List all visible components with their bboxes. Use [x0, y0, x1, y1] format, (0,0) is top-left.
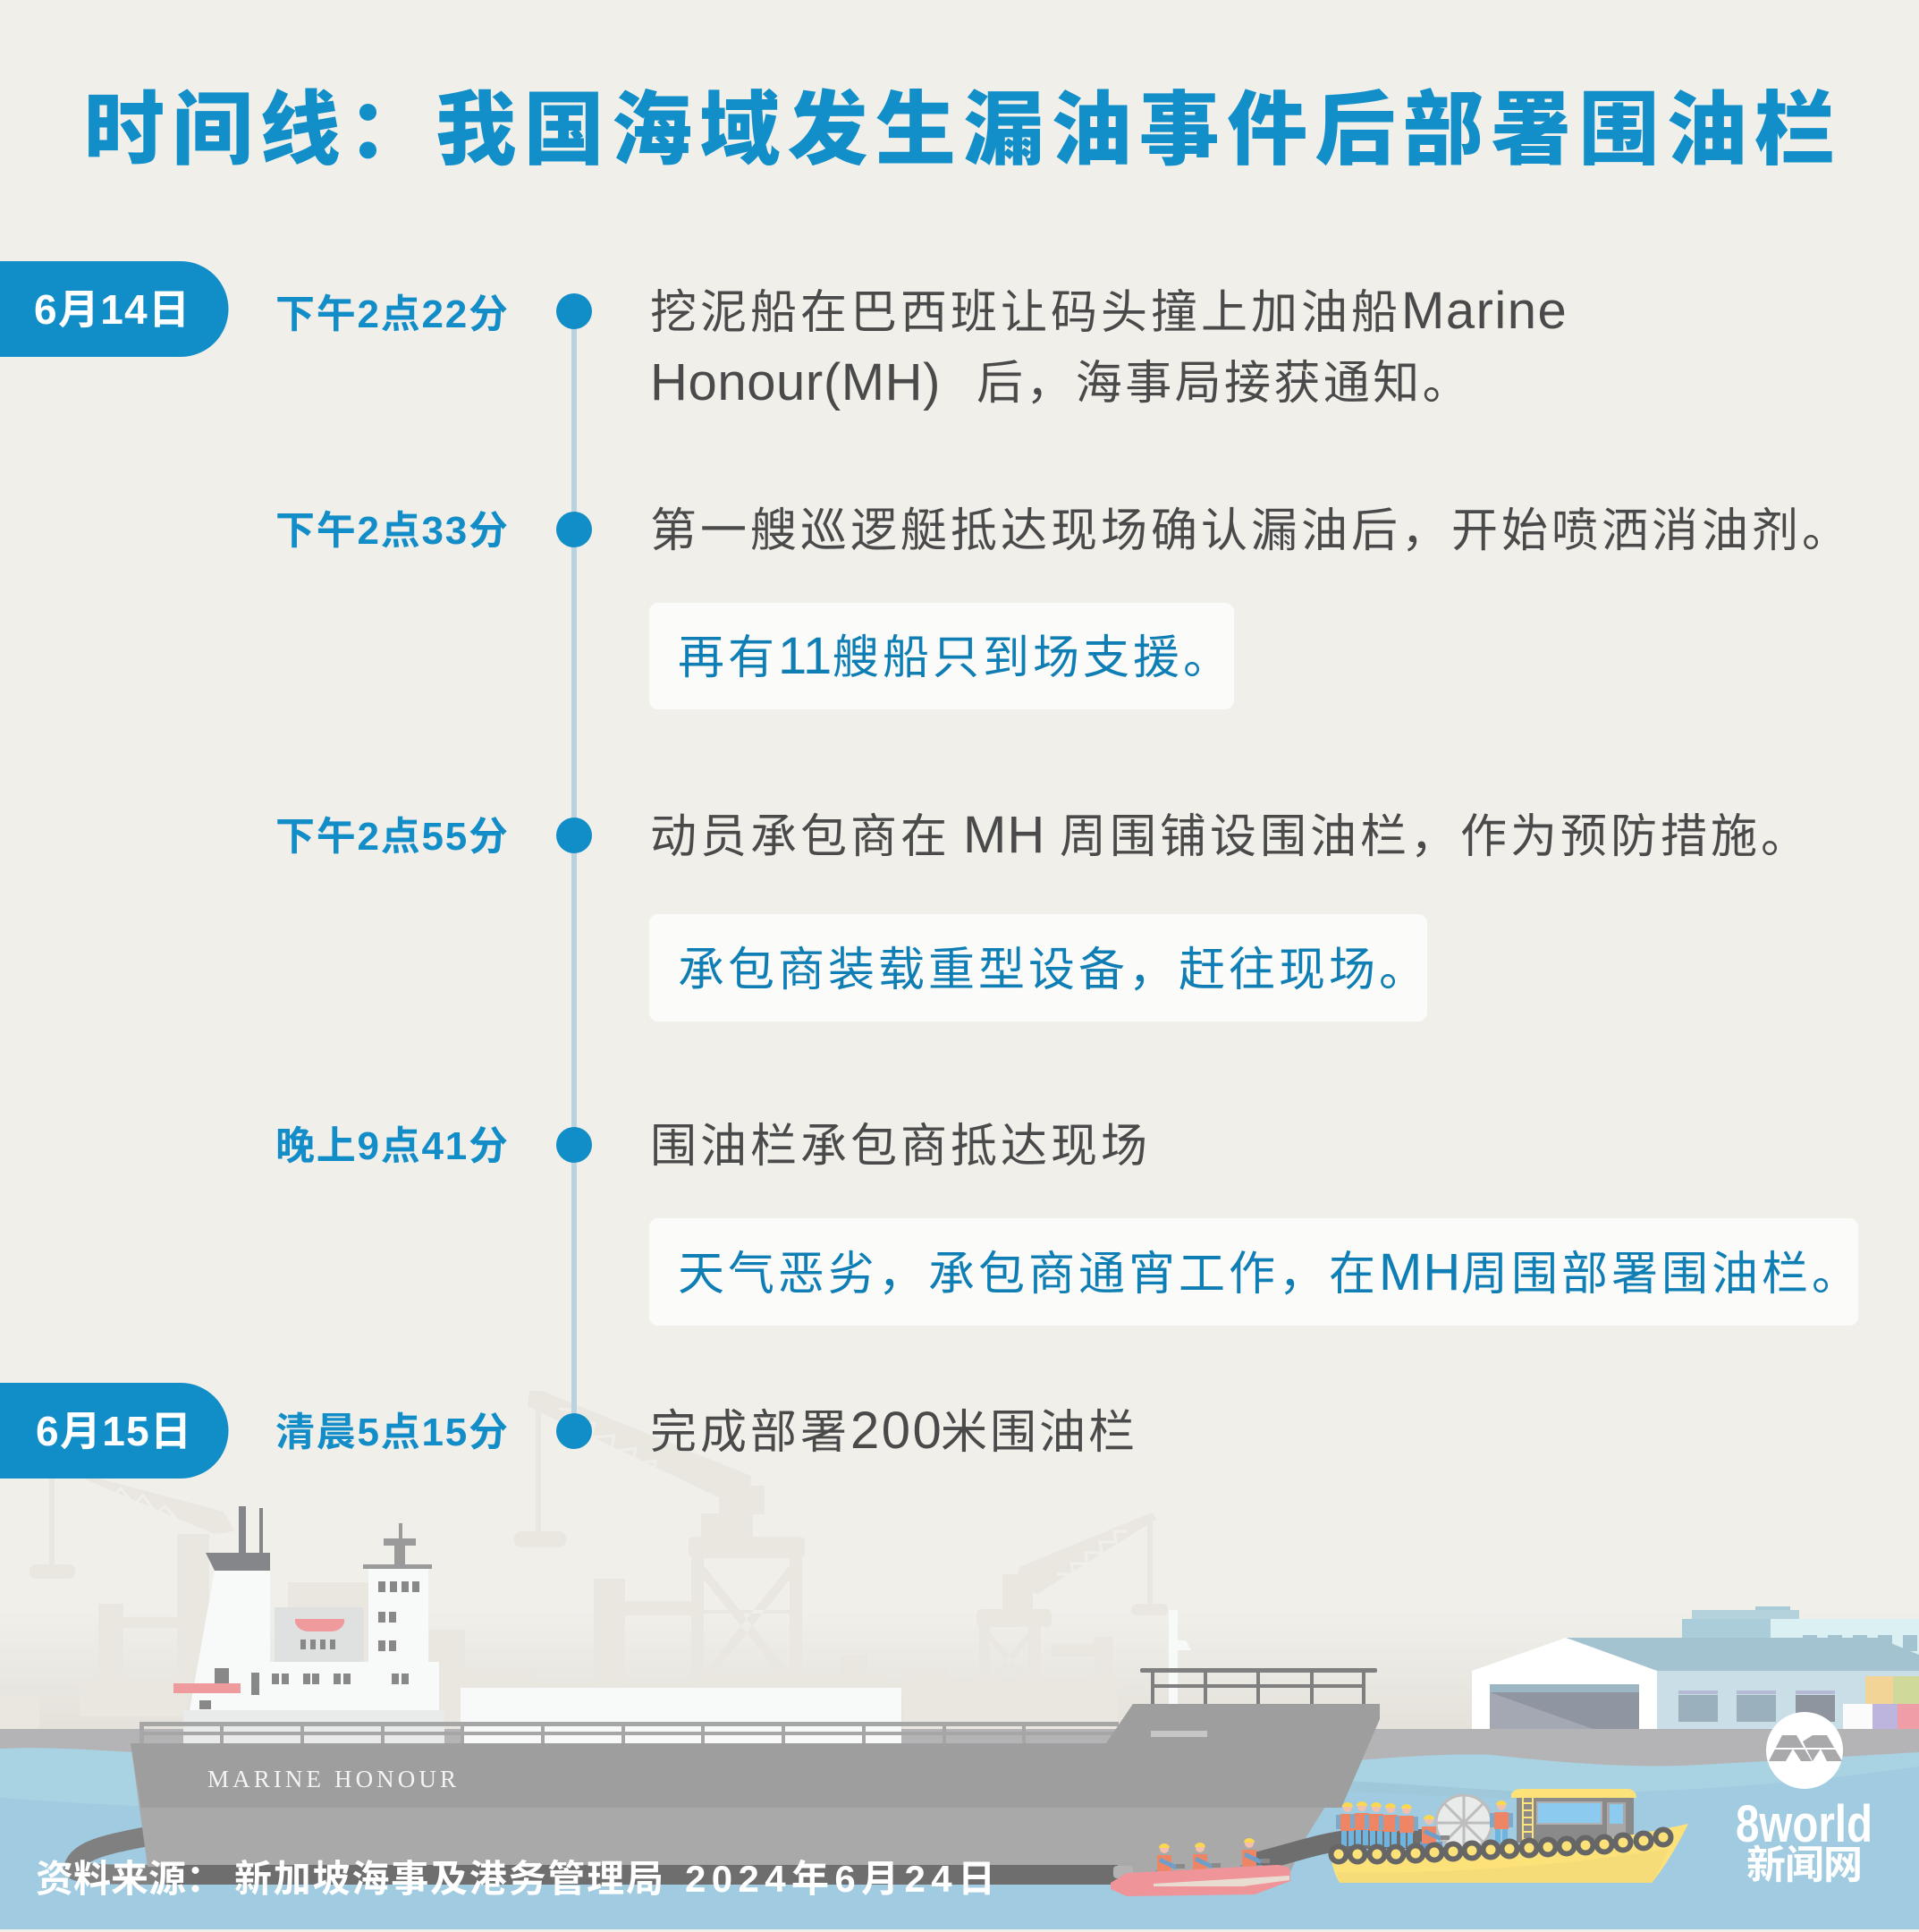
wharf [0, 1729, 1919, 1769]
callout: 再有11 [678, 627, 832, 685]
dot [556, 512, 592, 547]
workers on boat [1336, 1801, 1513, 1848]
timeline axis [571, 311, 577, 1430]
description: 后，海事局接获通知。 [976, 358, 1472, 410]
cable reel [1436, 1795, 1492, 1851]
sea [0, 1748, 1919, 1929]
cabin [1511, 1789, 1636, 1843]
callout [649, 603, 1234, 709]
callout: 天气恶劣，承包商通宵工作，在MH [678, 1243, 1461, 1301]
event 1 [275, 282, 1568, 411]
description: 完成部署200 [650, 1402, 943, 1460]
date tag: 6月15日 [0, 1383, 228, 1479]
hull upper band [131, 1704, 1380, 1808]
background cranes and skyline silhouette [0, 1391, 1168, 1729]
callout: 艘船只到场支援。 [833, 632, 1233, 684]
logo wordmark: 8world [1736, 1795, 1873, 1853]
warehouse gable [1472, 1638, 1657, 1732]
bow railing [1140, 1668, 1377, 1705]
time label: 晚上9点41分 [275, 1124, 508, 1168]
logo: 8world circle mark [1766, 1712, 1843, 1789]
description: 米围油栏 [941, 1407, 1137, 1459]
dot [556, 1413, 592, 1449]
containers [1843, 1676, 1919, 1732]
crane: centre [514, 1391, 887, 1700]
title: 时间线：我国海域发生漏油事件后部署围油栏 [84, 86, 1835, 175]
time label: 下午2点55分 [275, 815, 508, 859]
callout [649, 1218, 1862, 1326]
warehouse windows [1678, 1690, 1835, 1722]
deck railing [139, 1722, 1119, 1743]
tyres [1331, 1830, 1670, 1862]
bow mast [1169, 1610, 1191, 1704]
ship name: MARINE HONOUR [207, 1766, 456, 1792]
boat hull [1331, 1824, 1688, 1883]
background haze band [0, 1610, 1919, 1735]
callout: 周围部署围油栏。 [1461, 1249, 1862, 1301]
description: 围油栏承包商抵达现场 [650, 1121, 1151, 1173]
warehouse wall [1657, 1671, 1919, 1732]
lower deck [183, 1710, 444, 1743]
callout: 承包商装载重型设备，赶往现场。 [678, 945, 1429, 996]
cargo block [461, 1688, 901, 1743]
dot [556, 1127, 592, 1163]
dot [556, 293, 592, 329]
callout [649, 914, 1429, 1021]
time label: 下午2点22分 [275, 292, 508, 336]
description: MH [963, 806, 1045, 864]
source line: 新加坡海事及港务管理局 [234, 1858, 664, 1900]
description: 动员承包商在 [650, 811, 951, 863]
date tag: 6月14日: 6月14日 [34, 286, 190, 333]
source line: 2024年6月24日 [685, 1858, 995, 1900]
raft body [1111, 1865, 1290, 1896]
description: Honour(MH) [650, 353, 941, 411]
seated workers [1155, 1838, 1270, 1877]
back buildings [1682, 1606, 1919, 1655]
time label: 下午2点33分 [275, 509, 508, 553]
inflatable raft with crew [1111, 1838, 1290, 1896]
ship: Marine Honour [131, 1506, 1380, 1878]
bow window [1151, 1731, 1207, 1737]
raft stripe [1154, 1876, 1289, 1886]
warehouse roof [1566, 1638, 1919, 1671]
time label: 清晨5点15分 [275, 1411, 508, 1454]
source line: 资料来源： [36, 1858, 224, 1900]
yellow boom vessel [1331, 1789, 1688, 1883]
warehouse and port [1472, 1606, 1919, 1732]
date tag: 6月15日: 6月15日 [36, 1408, 191, 1454]
logo wordmark [1736, 1795, 1873, 1887]
description [650, 282, 1568, 411]
hull shade [1336, 1849, 1669, 1883]
logo wordmark: 新闻网 [1746, 1843, 1863, 1887]
event 4 [275, 1121, 1862, 1326]
crane: right [976, 1513, 1168, 1688]
oil boom, left section [73, 1836, 1118, 1875]
superstructure [173, 1506, 439, 1710]
skyline blocks [0, 1582, 1118, 1729]
event 2 [275, 505, 1852, 709]
event 3 [275, 806, 1811, 1021]
crane: left [30, 1476, 234, 1716]
event 5 [275, 1402, 1137, 1460]
source line [36, 1858, 995, 1900]
hull [131, 1704, 1380, 1878]
description: 挖泥船在巴西班让码头撞上加油船Marine [650, 282, 1568, 340]
description: 第一艘巡逻艇抵达现场确认漏油后，开始喷洒消油剂。 [650, 505, 1852, 557]
outboard motor [1113, 1866, 1133, 1878]
date tag: 6月14日 [0, 261, 228, 357]
description: 周围铺设围油栏，作为预防措施。 [1060, 811, 1811, 863]
warehouse door [1490, 1684, 1639, 1732]
oil boom, over hull [170, 1839, 1422, 1875]
dot [556, 818, 592, 853]
